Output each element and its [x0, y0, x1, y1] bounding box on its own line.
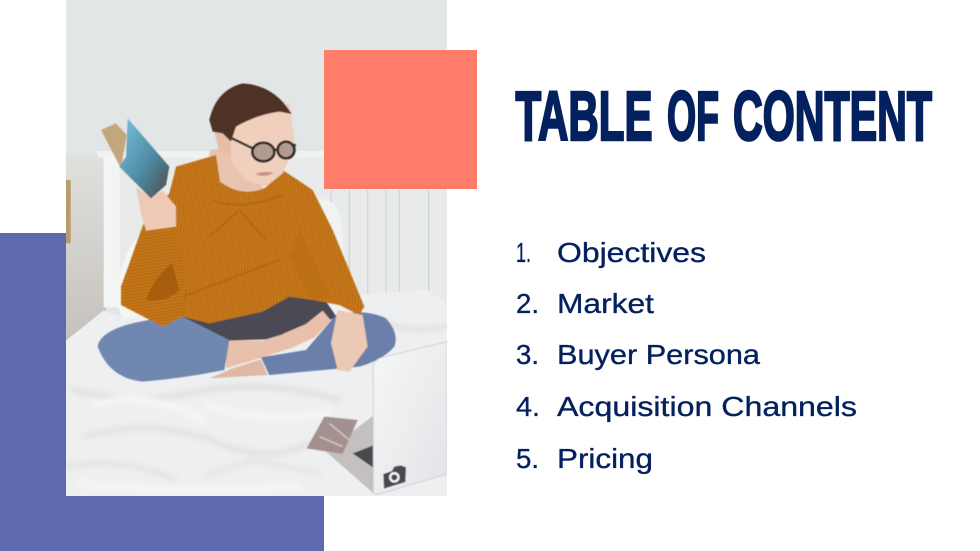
left hand [136, 187, 176, 231]
camera sticker [383, 465, 406, 489]
photo: woman on bed with book and laptop [66, 0, 447, 496]
glasses [232, 138, 295, 161]
laptop base and keyboard [326, 415, 374, 494]
item 4: Acquisition Channels [557, 391, 857, 422]
coral accent square [324, 50, 477, 189]
phone [307, 417, 358, 454]
title: TABLE [516, 77, 652, 155]
orange sweater [121, 155, 364, 327]
item 2: Market [557, 288, 654, 319]
item 1 [516, 237, 706, 268]
left wall section [66, 155, 106, 345]
item 1: Objectives [557, 237, 706, 268]
item 1: 1. [516, 237, 531, 268]
jeans [97, 296, 396, 382]
item 2: 2. [516, 288, 539, 319]
book [101, 118, 169, 198]
item 5 [516, 443, 653, 474]
title: OF [667, 77, 719, 155]
item 5: 5. [516, 443, 539, 474]
bed sheets [66, 290, 447, 496]
neck [209, 147, 263, 200]
item 2 [516, 288, 654, 319]
laptop lid [373, 342, 447, 495]
blue accent block [0, 233, 324, 551]
hair [209, 83, 292, 142]
item 3: Buyer Persona [557, 339, 760, 370]
item 3: 3. [516, 339, 539, 370]
right hand [331, 310, 368, 372]
item 5: Pricing [557, 443, 653, 474]
item 4: 4. [516, 391, 540, 422]
contents list [516, 237, 857, 474]
bare calf and foot [210, 334, 293, 379]
pillows [118, 239, 143, 318]
face and ear [214, 103, 295, 187]
headboard [98, 151, 447, 307]
title [516, 77, 932, 155]
